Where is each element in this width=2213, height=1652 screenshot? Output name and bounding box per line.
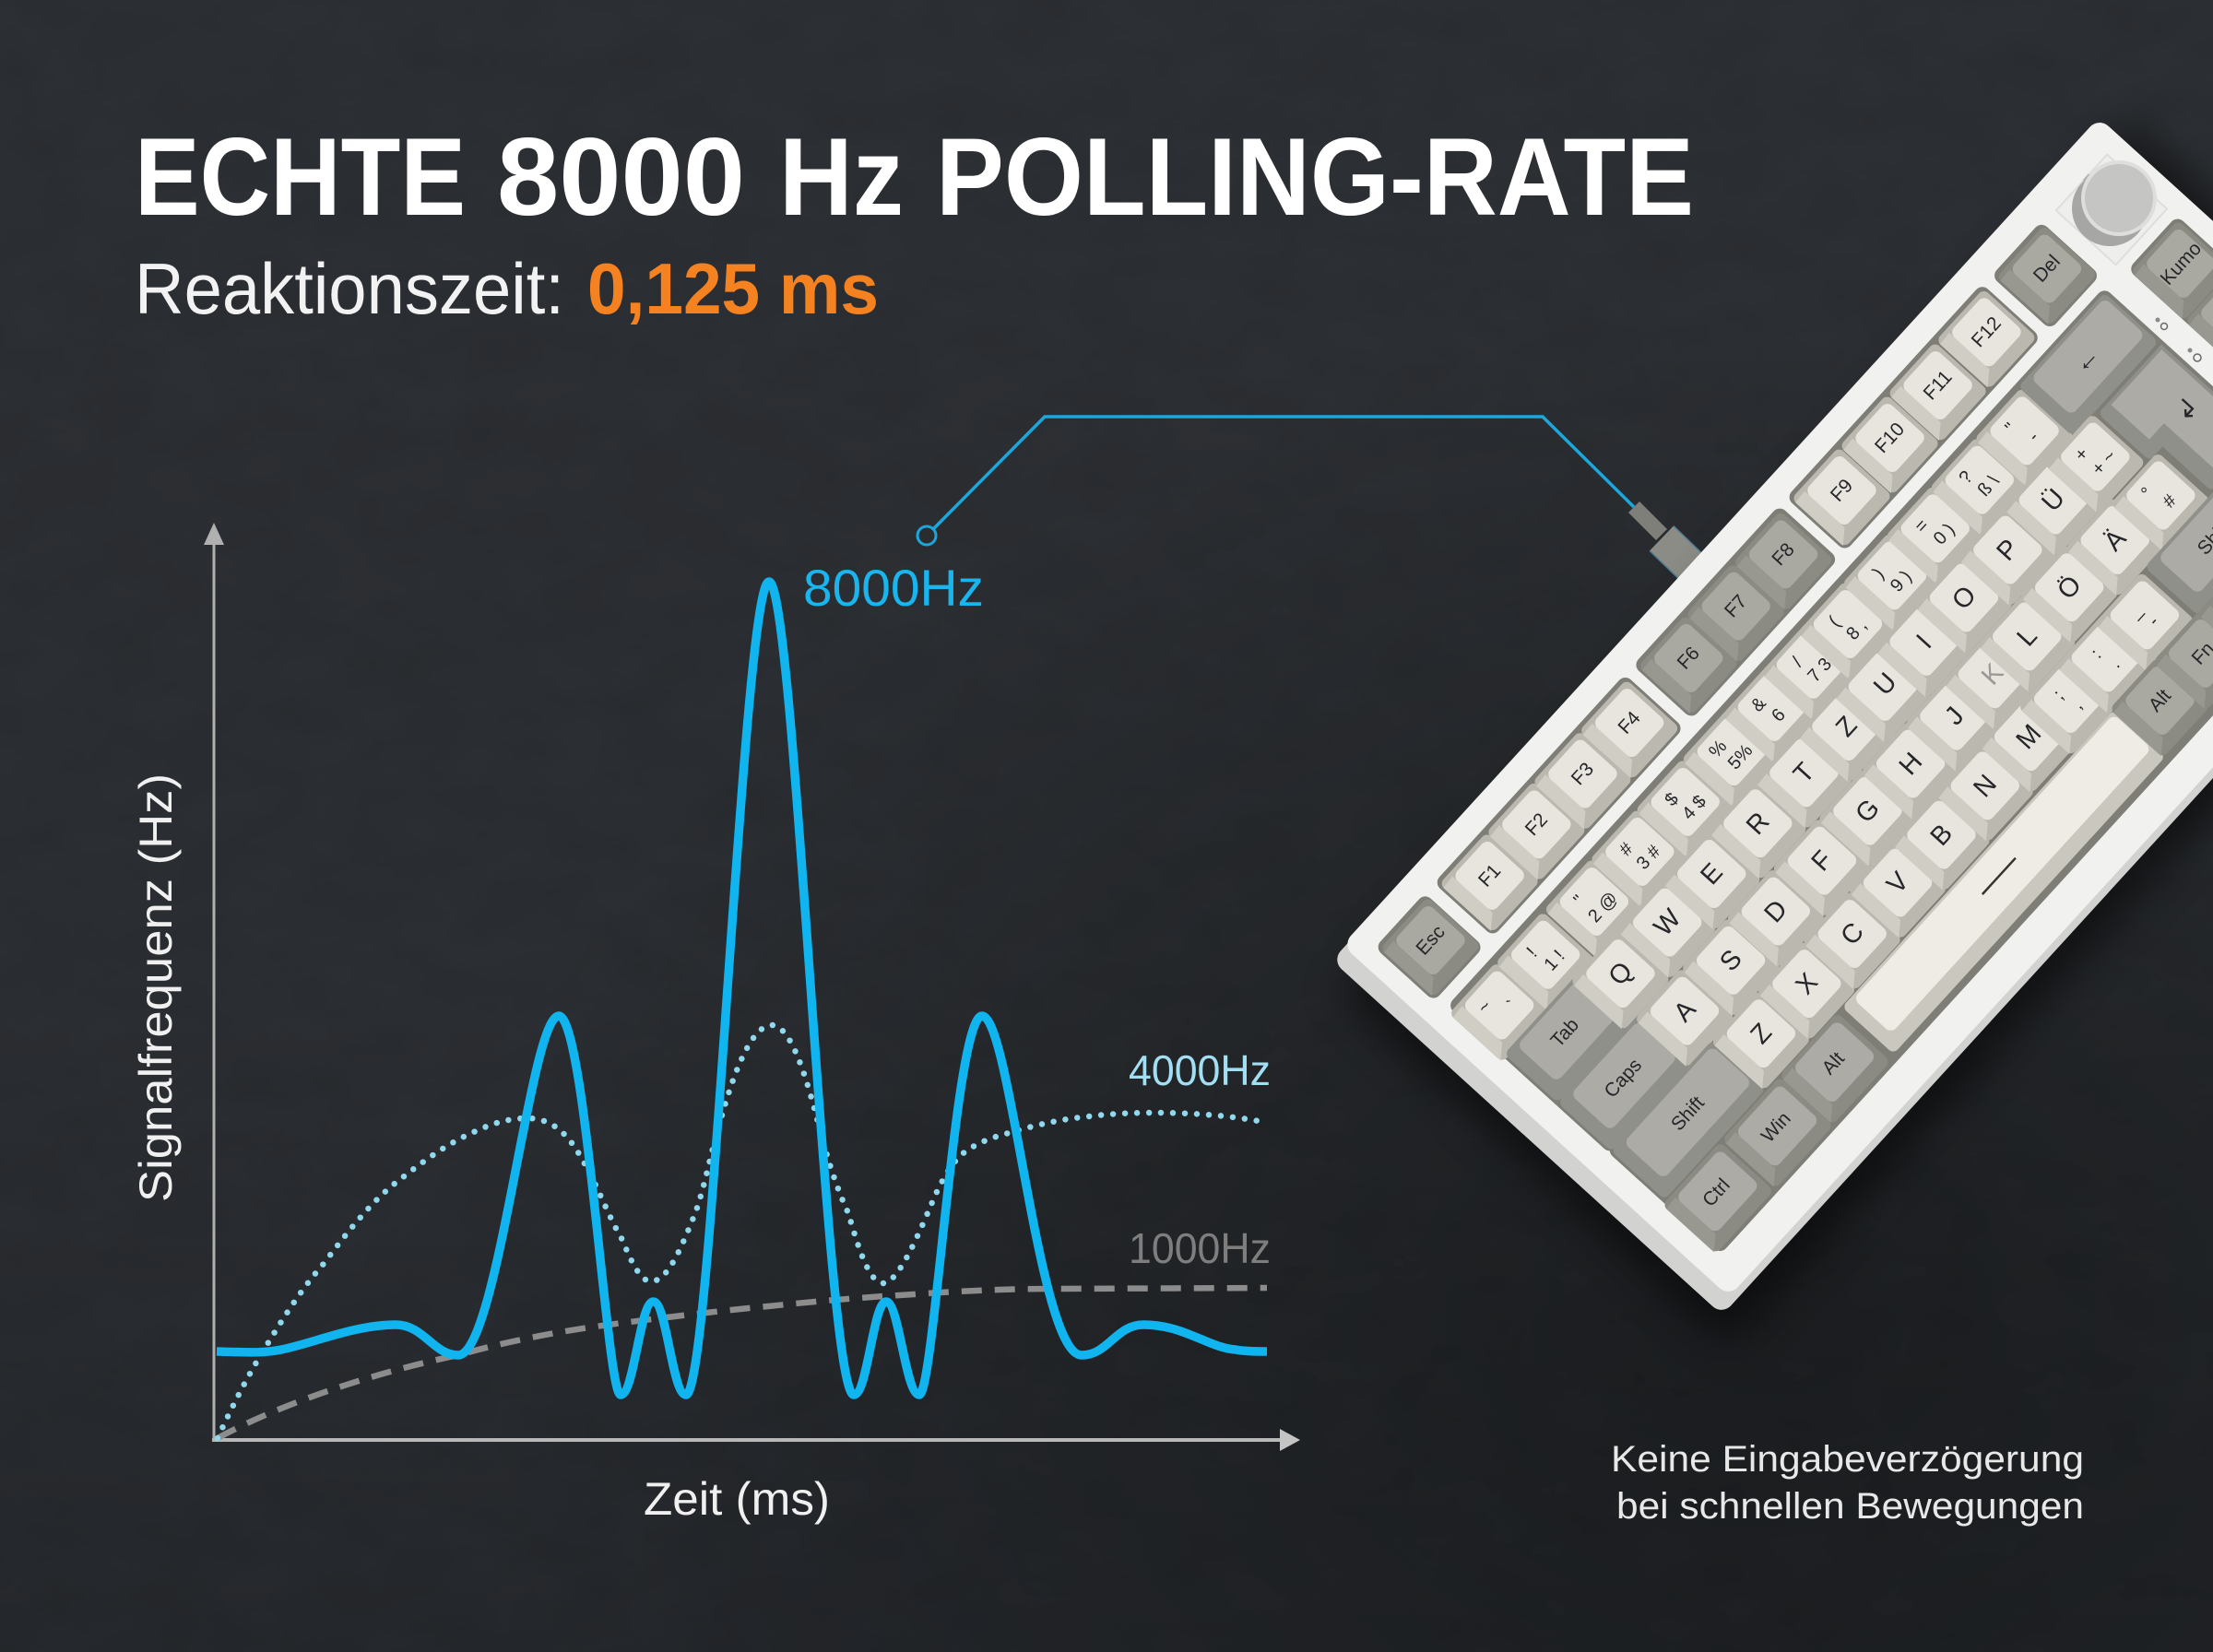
number key row: 3 #	[1633, 842, 1665, 874]
number key row: (	[1825, 612, 1844, 631]
number key row: %	[1705, 737, 1731, 761]
1000Hz dashed curve	[218, 1288, 1267, 1438]
number key row: ?	[1955, 467, 1977, 489]
function key row: F7	[1721, 591, 1751, 621]
function key row: F10	[1871, 419, 1909, 457]
QWERTZ key row: T	[1788, 757, 1820, 789]
function key row: F3	[1568, 759, 1598, 789]
enter key: ↲	[2169, 392, 2206, 428]
Kumo key and right column: Kumo	[2156, 238, 2206, 289]
ZXCV key row: .	[2106, 655, 2124, 672]
space bar	[1842, 710, 2166, 1054]
QWERTZ key row: U	[1868, 667, 1903, 702]
number key row: 5%	[1724, 740, 1757, 773]
label 4000Hz: 4000Hz	[1129, 1046, 1271, 1094]
number key row: `	[1504, 997, 1523, 1015]
key well plates	[1375, 125, 2213, 1258]
QWERTZ key row: Z	[1830, 711, 1864, 743]
number key row: )	[1869, 564, 1888, 583]
callout line from chart to USB cable	[917, 417, 1634, 545]
QWERTZ key row: I	[1911, 629, 1937, 655]
ZXCV key row: M	[2010, 719, 2047, 755]
line chart: signal frequency over time	[130, 523, 1300, 1525]
label 8000Hz: 8000Hz	[803, 559, 984, 617]
caption: no input delay	[1611, 1439, 2084, 1527]
QWERTZ key row: R	[1741, 807, 1776, 841]
keyboard shadow	[1337, 124, 2213, 1347]
ASDF key row: D	[1758, 894, 1793, 928]
function key row: F8	[1768, 539, 1799, 570]
function key row: F11	[1919, 367, 1957, 404]
ASDF key row: °	[2137, 484, 2158, 502]
ZXCV key row: :	[2087, 645, 2105, 663]
knob recess	[2056, 155, 2167, 265]
ZXCV key row: ;	[2050, 686, 2068, 703]
ASDF key row	[1556, 448, 2211, 1154]
ZXCV key row: -	[2144, 612, 2163, 630]
function key row: F6	[1673, 643, 1704, 674]
ASDF key row: K	[1976, 658, 2009, 691]
number key row: 8 ,	[1842, 616, 1871, 644]
icon: volume knob	[2072, 160, 2157, 246]
bottom key row: Alt	[1818, 1048, 1849, 1079]
ZXCV key row: N	[1968, 769, 2003, 803]
ASDF key row: S	[1714, 944, 1748, 977]
keyboard case lip	[1332, 119, 2213, 1316]
QWERTZ key row: Ü	[2036, 483, 2071, 517]
QWERTZ key row	[1504, 412, 2146, 1104]
ZXCV key row	[1609, 474, 2213, 1200]
title: POLLING-RATE	[936, 115, 1694, 239]
subtitle: reaction time	[135, 248, 879, 329]
QWERTZ key row: E	[1695, 857, 1729, 891]
number key row: ß \	[1974, 471, 2004, 501]
number key row: 6	[1768, 705, 1790, 726]
function key row: F9	[1827, 475, 1857, 506]
QWERTZ key row: +	[2071, 443, 2093, 466]
title: Hz	[779, 115, 904, 239]
y axis with arrow	[204, 523, 224, 1441]
ZXCV key row: B	[1924, 819, 1959, 852]
ZXCV key row: X	[1790, 968, 1824, 1000]
ASDF key row: Ö	[2052, 570, 2088, 606]
number key row: /	[1788, 653, 1807, 671]
label 1000Hz: 1000Hz	[1129, 1224, 1271, 1272]
ASDF key row: #	[2159, 490, 2181, 512]
function key row: F12	[1968, 313, 2006, 351]
x axis with arrow	[212, 1429, 1300, 1451]
ZXCV key row: Shift	[1667, 1092, 1709, 1135]
number key row: 2 @	[1584, 888, 1622, 926]
function key row: F2	[1521, 809, 1552, 840]
number key row: 7 3	[1804, 655, 1836, 687]
USB cable connector	[1634, 507, 1711, 586]
function key row: Del	[2030, 251, 2065, 287]
icon: LED indicators	[2156, 317, 2201, 361]
ASDF key row: L	[2011, 621, 2043, 652]
y axis label: Signalfrequenz (Hz)	[130, 773, 182, 1202]
keyboard case top	[1343, 117, 2213, 1297]
ASDF key row: H	[1893, 747, 1928, 781]
x axis label: Zeit (ms)	[644, 1473, 830, 1525]
title: 8000	[497, 115, 745, 239]
function key row: F1	[1474, 860, 1505, 891]
QWERTZ key row: O	[1947, 581, 1982, 616]
ZXCV key row: ,	[2068, 696, 2087, 714]
QWERTZ key row: P	[1991, 534, 2025, 567]
number key row: #	[1615, 839, 1638, 860]
8000Hz solid curve	[217, 582, 1267, 1395]
number key row: "	[1569, 891, 1590, 910]
Kumo key and right column	[2131, 220, 2213, 371]
number key row	[1447, 292, 2160, 1063]
number key row: =	[1911, 515, 1933, 537]
number key row: $	[1661, 789, 1683, 810]
caption: no input delay: Keine Eingabeverzögerung	[1611, 1439, 2084, 1480]
function key row: Esc	[1412, 921, 1450, 960]
title	[135, 115, 1694, 239]
ASDF key row: G	[1850, 794, 1886, 829]
number key row: -	[2024, 428, 2043, 445]
number key row: ←	[2066, 340, 2106, 380]
ASDF key row: A	[1668, 994, 1702, 1028]
enter key	[2098, 345, 2213, 505]
QWERTZ key row: Q	[1603, 956, 1639, 991]
ZXCV key row: V	[1881, 866, 1915, 900]
4000Hz dotted curve	[218, 1025, 1263, 1438]
number key row: 1 !	[1540, 946, 1569, 975]
title: ECHTE	[135, 115, 466, 239]
caption: no input delay: bei schnellen Bewegungen	[1616, 1486, 2084, 1527]
ZXCV key row: Z	[1745, 1018, 1778, 1050]
number key row: ~	[1473, 997, 1496, 1018]
bottom key row: Alt	[2145, 685, 2175, 716]
bottom key row: Win	[1757, 1108, 1795, 1147]
number key row: "	[2001, 419, 2021, 438]
bottom key row	[1659, 561, 2213, 1254]
QWERTZ key row: Tab	[1546, 1014, 1583, 1052]
ASDF key row: J	[1939, 702, 1970, 731]
ASDF key row: Caps	[1600, 1055, 1646, 1102]
QWERTZ key row: + ~	[2088, 446, 2121, 479]
function key row	[1380, 224, 2098, 998]
number key row: 9 )	[1887, 567, 1916, 596]
number key row: 4 $	[1678, 792, 1710, 824]
keyboard	[1330, 108, 2213, 1316]
ASDF key row: Ä	[2099, 524, 2133, 557]
number key row: !	[1523, 944, 1542, 962]
function key row: F4	[1614, 707, 1645, 738]
ZXCV key row: C	[1835, 917, 1870, 951]
subtitle: reaction time: 0,125 ms	[587, 248, 879, 329]
subtitle: reaction time: Reaktionszeit:	[135, 248, 564, 329]
ZXCV key row: _	[2124, 600, 2147, 622]
number key row: &	[1747, 693, 1770, 716]
number key row: 0 )	[1930, 520, 1959, 549]
ASDF key row: F	[1805, 845, 1839, 877]
bottom key row: Ctrl	[1698, 1174, 1734, 1210]
QWERTZ key row: W	[1648, 903, 1687, 942]
